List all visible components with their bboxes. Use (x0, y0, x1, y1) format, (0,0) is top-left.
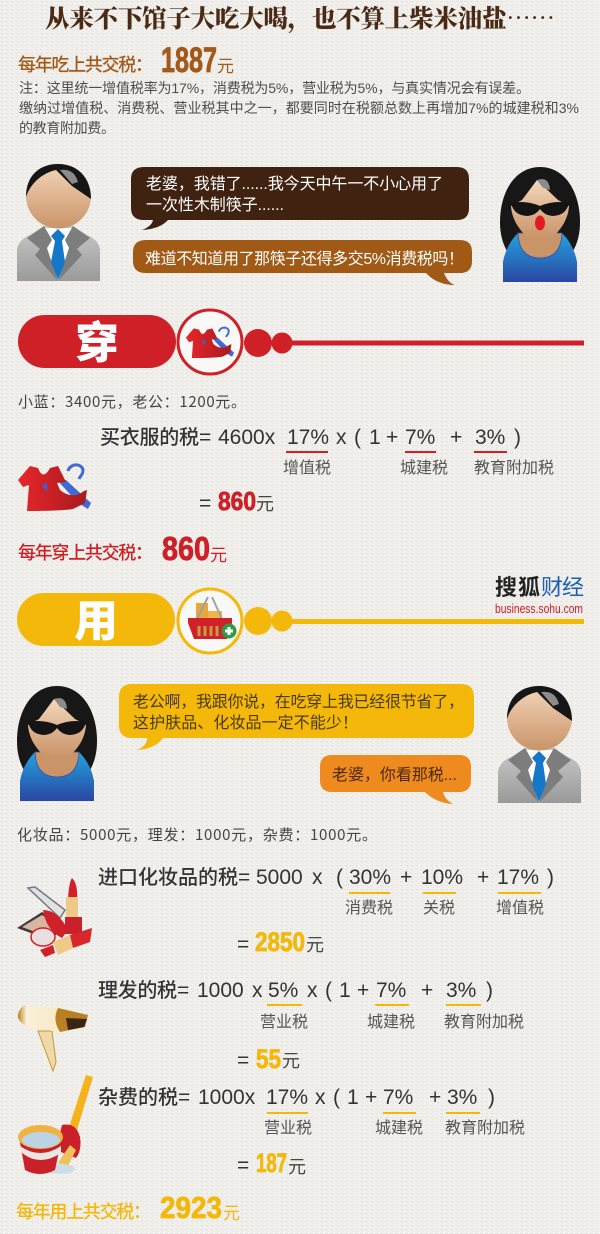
cosmetics formula: = (238, 866, 250, 889)
speech bubble: wife: 老公啊，我跟你说，在吃穿上我已经很节省了， (133, 693, 464, 711)
logo: sohu business (495, 570, 584, 616)
section: eating total (18, 41, 234, 80)
misc formula: = (178, 1086, 190, 1109)
hair formula: + (421, 979, 433, 1002)
speech bubble: husband: 一次性木制筷子...... (146, 196, 284, 214)
misc formula: 7% (383, 1086, 413, 1109)
title: 从来不下馆子大吃大喝，也不算上柴米油盐…… (45, 0, 555, 35)
cosmetics formula: 17% (497, 866, 539, 889)
hair result: = (237, 1049, 249, 1072)
section: clothing total (18, 530, 227, 567)
note text: 的教育附加费。 (19, 120, 115, 136)
clothing formula: + (386, 426, 398, 449)
misc formula: + (429, 1086, 441, 1109)
cosmetics result: 2850 (255, 927, 305, 957)
dialogue 1 (17, 164, 580, 285)
pill: clothing (18, 315, 176, 368)
speech bubble: wife: 难道不知道用了那筷子还得多交5%消费税吗！ (145, 250, 464, 268)
misc formula (98, 1081, 525, 1138)
misc formula: 1 (347, 1086, 359, 1109)
cosmetics formula: ) (547, 866, 554, 889)
icon: shopping basket badge (178, 589, 242, 653)
clothing formula: 3% (475, 426, 505, 449)
speech bubble: wife (119, 684, 474, 750)
cosmetics formula: x (312, 866, 323, 889)
speech bubble: husband (131, 167, 469, 230)
hair formula: + (357, 979, 369, 1002)
section: daily use total: 元 (223, 1199, 240, 1224)
clothing formula: ( (354, 426, 361, 449)
icon: clothing badge (178, 310, 242, 374)
section header: clothing (18, 307, 584, 374)
clothing formula: 1 (369, 426, 381, 449)
cosmetics formula (98, 861, 554, 918)
misc formula: 城建税 (375, 1114, 423, 1138)
cosmetics formula: 关税 (423, 894, 455, 918)
cosmetics formula: 增值税 (496, 894, 544, 918)
hair result (237, 1044, 300, 1074)
clothing formula: 教育附加税 (474, 454, 554, 478)
hair formula: 理发的税 (98, 974, 177, 1003)
use amounts: 化妆品：5000元，理发：1000元，杂费：1000元。 (17, 824, 377, 845)
misc formula: 1000x (198, 1086, 256, 1109)
section: daily use total (16, 1190, 240, 1225)
cosmetics formula: 进口化妆品的税 (98, 861, 238, 890)
icon: husband (498, 686, 581, 803)
note text: 注：这里统一增值税率为17%，消费税为5%，营业税为5%，与真实情况会有误差。 (19, 80, 530, 96)
clothing result: = (199, 492, 211, 515)
pill label: 用 (74, 585, 118, 649)
icon: husband (17, 164, 100, 281)
section header: daily use (17, 585, 584, 653)
clothing formula: 7% (405, 426, 435, 449)
hair formula: 营业税 (260, 1008, 308, 1032)
eating total value: 1887 (161, 41, 217, 80)
hair formula: ( (325, 979, 332, 1002)
cosmetics result (237, 927, 324, 957)
pill label: 穿 (75, 307, 119, 371)
misc formula: ( (333, 1086, 340, 1109)
hair formula: 城建税 (367, 1008, 415, 1032)
note text (19, 80, 579, 136)
hair formula: 3% (446, 979, 476, 1002)
beads (244, 607, 292, 635)
clothing result: 元 (256, 490, 274, 516)
header line (282, 619, 584, 624)
hair formula: 教育附加税 (444, 1008, 524, 1032)
hair result: 元 (282, 1047, 300, 1073)
hair formula: 5% (268, 979, 298, 1002)
misc formula: 17% (266, 1086, 308, 1109)
logo: sohu business: 搜狐 (495, 570, 540, 602)
icon: cosmetics (17, 878, 92, 957)
misc formula: 营业税 (264, 1114, 312, 1138)
clothing formula: 4600x (218, 426, 276, 449)
section: clothing total: 元 (210, 541, 227, 566)
header line (282, 340, 584, 346)
clothing formula: 城建税 (400, 454, 448, 478)
note text: 缴纳过增值税、消费税、营业税其中之一，都要同时在税额总数上再增加7%的城建税和3% (19, 100, 579, 116)
speech bubble: husband (320, 755, 471, 804)
speech bubble: wife (133, 240, 472, 285)
clothing formula: = (199, 426, 211, 449)
icon: bucket and broom (18, 1075, 93, 1174)
clothing formula: 买衣服的税 (100, 421, 199, 450)
clothing formula: x (336, 426, 347, 449)
icon: hair dryer (18, 1005, 88, 1071)
misc result: 187 (256, 1148, 287, 1178)
cosmetics formula: 10% (421, 866, 463, 889)
clothing amounts: 小蓝：3400元，老公：1200元。 (18, 391, 246, 412)
speech bubble: husband: 老婆，我错了......我今天中午一不小心用了 (146, 175, 443, 193)
misc formula: 3% (447, 1086, 477, 1109)
hair formula (98, 974, 524, 1032)
speech bubble: wife: 这护肤品、化妆品一定不能少！ (133, 714, 358, 732)
hair formula: = (177, 979, 189, 1002)
clothing icon (18, 465, 91, 511)
beads (244, 329, 292, 357)
icon: wife (17, 686, 97, 801)
clothing result (199, 486, 274, 516)
misc formula: 杂费的税 (98, 1081, 178, 1110)
section: clothing total: 860 (162, 530, 210, 567)
hair formula: 1 (339, 979, 351, 1002)
speech bubble: husband: 老婆，你看那税... (332, 766, 457, 784)
hair formula: x (252, 979, 263, 1002)
hair formula: 1000 (197, 979, 244, 1002)
pill: daily use (17, 593, 175, 646)
clothing formula: 17% (287, 426, 329, 449)
cosmetics formula: 5000 (256, 866, 303, 889)
eating total label: 每年吃上共交税： (18, 51, 153, 77)
hair formula: ) (486, 979, 493, 1002)
misc result (237, 1148, 306, 1179)
logo: sohu business: 财经 (541, 570, 584, 602)
section: clothing total: 每年穿上共交税： (18, 539, 153, 565)
misc formula: 教育附加税 (445, 1114, 525, 1138)
cosmetics result: = (237, 933, 249, 956)
clothing result: 860 (218, 486, 256, 516)
icon: wife with open mouth (500, 167, 580, 282)
section: daily use total: 每年用上共交税： (16, 1198, 151, 1224)
clothing formula (100, 421, 554, 478)
cosmetics formula: 30% (349, 866, 391, 889)
section: daily use total: 2923 (160, 1190, 222, 1225)
eating total unit: 元 (217, 52, 234, 77)
dialogue 2 (17, 684, 581, 804)
misc result: = (237, 1154, 249, 1177)
cosmetics formula: 消费税 (345, 894, 393, 918)
clothing formula: 增值税 (283, 454, 331, 478)
hair formula: 7% (376, 979, 406, 1002)
clothing formula: ) (514, 426, 521, 449)
misc formula: + (365, 1086, 377, 1109)
cosmetics formula: + (400, 866, 412, 889)
misc formula: ) (488, 1086, 495, 1109)
cosmetics formula: + (477, 866, 489, 889)
cosmetics result: 元 (306, 931, 324, 957)
misc formula: x (315, 1086, 326, 1109)
misc result: 元 (288, 1153, 306, 1179)
clothing formula: + (450, 426, 462, 449)
hair result: 55 (256, 1044, 281, 1074)
hair formula: x (307, 979, 318, 1002)
cosmetics formula: ( (336, 866, 343, 889)
